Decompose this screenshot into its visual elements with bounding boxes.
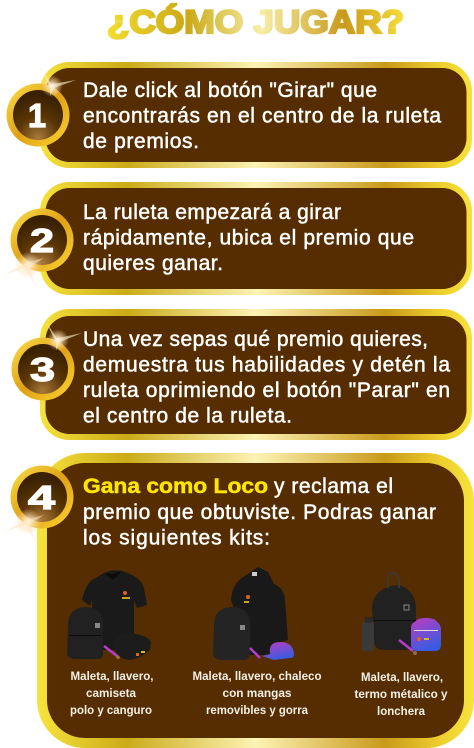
panel: step 2 xyxy=(3,182,472,295)
step 4 text: y reclama el xyxy=(274,475,393,498)
step 3 badge xyxy=(12,322,82,400)
step 3 text: ruleta oprimiendo el botón "Parar" en xyxy=(83,379,450,402)
step 2 text xyxy=(83,201,414,275)
panel: step 3 xyxy=(12,309,472,440)
title: ¿CÓMO JUGAR? xyxy=(107,4,404,40)
kit 1 caption xyxy=(70,669,154,717)
step 4 badge: 4 xyxy=(28,479,56,516)
step 4 text xyxy=(83,475,436,550)
step 4 text: premio que obtuviste. Podras ganar xyxy=(83,501,436,524)
step 1 text: encontrarás en el centro de la ruleta xyxy=(83,104,441,128)
step 3 text: Una vez sepas qué premio quieres, xyxy=(83,328,428,351)
kit 2 caption: con mangas xyxy=(222,686,292,700)
step 2 text: La ruleta empezará a girar xyxy=(83,201,341,224)
kit 3 image: backpack, bottle, keychain and lunchbox xyxy=(362,573,441,655)
kit 2 image: jacket vest, backpack, keychain and cap xyxy=(213,567,294,660)
kit 2 caption: Maleta, llavero, chaleco xyxy=(192,669,322,683)
kit 3 caption xyxy=(354,670,448,718)
step 2 badge: 2 xyxy=(30,222,54,259)
step 3 text: el centro de la ruleta. xyxy=(83,404,292,428)
step 1 text xyxy=(83,79,441,153)
kit 3 caption: Maleta, llavero, xyxy=(361,670,443,684)
step 1 text: de premios. xyxy=(83,130,199,153)
panel: step 1 xyxy=(6,62,472,168)
step 3 text: demuestra tus habilidades y detén la xyxy=(83,354,450,376)
step 3 badge: 3 xyxy=(30,351,55,388)
step 2 text: rápidamente, ubica el premio que xyxy=(83,226,414,250)
kit 1 image: polo, backpack, keychain and fanny pack xyxy=(67,570,151,660)
kit 3 caption: termo métalico y xyxy=(354,687,448,701)
step 4 text: Gana como Loco xyxy=(83,475,268,498)
kit 2 caption: removibles y gorra xyxy=(206,703,308,717)
kit 2 caption xyxy=(192,669,322,717)
kit 3 caption: lonchera xyxy=(377,704,425,718)
step 2 text: quieres ganar. xyxy=(83,252,223,275)
kit 1 caption: polo y canguro xyxy=(70,703,152,717)
kit 1 caption: Maleta, llavero, xyxy=(70,669,154,683)
step 4 text: los siguientes kits: xyxy=(83,526,270,550)
kit 1 caption: camiseta xyxy=(86,686,136,700)
panel: step 4 xyxy=(3,453,474,748)
step 1 text: Dale click al botón "Girar" que xyxy=(83,79,377,102)
step 3 text xyxy=(83,328,450,428)
step 4 badge xyxy=(3,466,74,544)
step 2 badge xyxy=(3,208,74,288)
step 1 badge xyxy=(6,66,76,146)
step 1 badge: 1 xyxy=(28,97,46,134)
